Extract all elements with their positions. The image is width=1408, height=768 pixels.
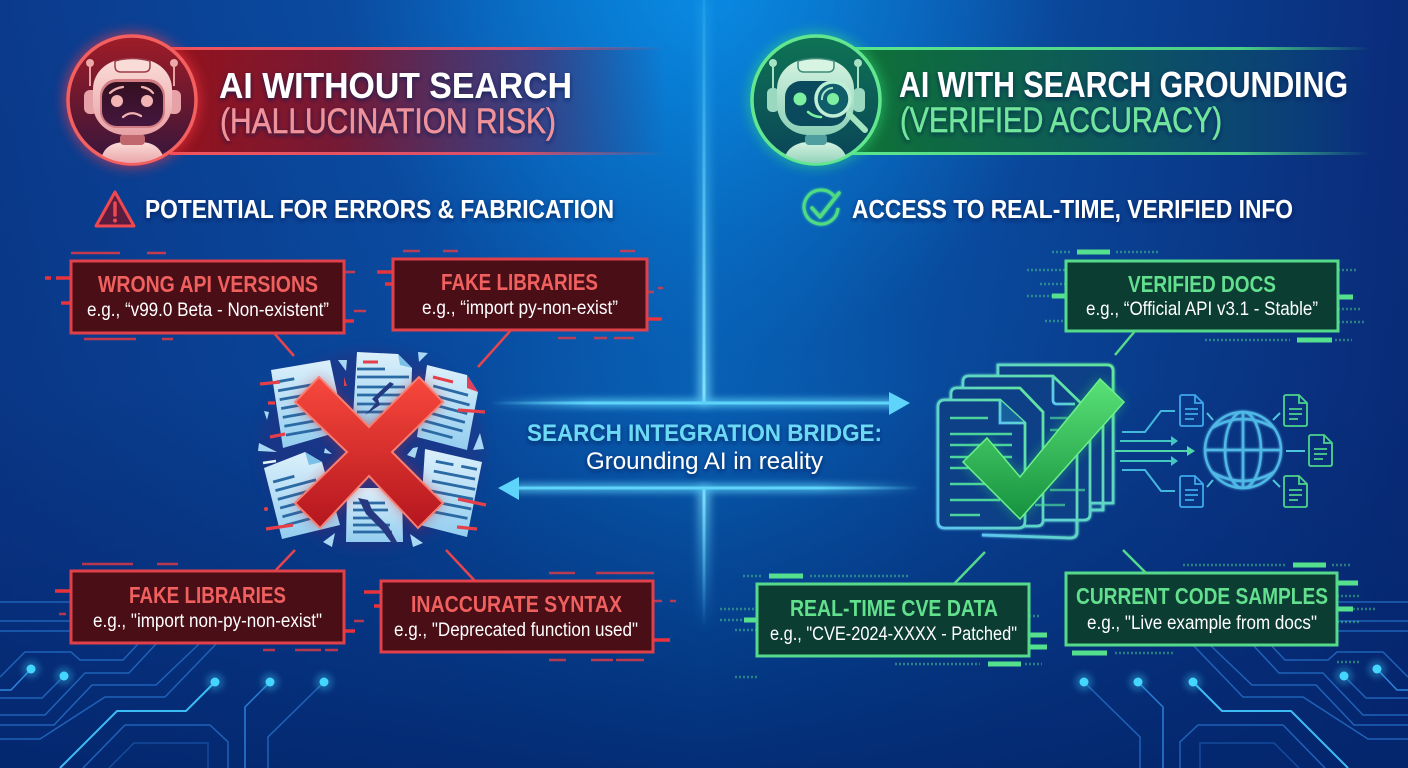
heading: AI without search: AI WITHOUT SEARCH <box>219 65 572 106</box>
right header banner <box>850 47 1370 155</box>
callout: wrong API versions: e.g., “v99.0 Beta - Non-existent” <box>87 300 329 321</box>
central vertical divider <box>700 0 708 628</box>
icon: warning triangle <box>96 192 134 226</box>
red X mark <box>295 377 443 528</box>
green check mark <box>963 379 1124 519</box>
subheading: access to verified info: ACCESS TO REAL-TIME, VERIFIED INFO <box>852 194 1293 224</box>
subheading: potential errors: POTENTIAL FOR ERRORS & FABRICATION <box>145 194 614 224</box>
callout: inaccurate syntax: e.g., "Deprecated function used" <box>394 620 638 641</box>
circuit traces: bottom right <box>1075 602 1408 768</box>
callout: inaccurate syntax <box>364 573 676 660</box>
connector lines: red <box>274 330 511 581</box>
callout: fake libraries (bottom): FAKE LIBRARIES <box>129 582 286 608</box>
icon: data flow arrows to globe <box>1115 411 1195 491</box>
icon: globe <box>1205 412 1281 488</box>
heading: AI with search grounding: (VERIFIED ACCURACY) <box>900 101 1222 140</box>
search integration bridge: arrow to the left <box>498 477 920 500</box>
callout: real-time CVE data: REAL-TIME CVE DATA <box>790 595 998 621</box>
icon: robot with magnifier in green circle <box>748 32 884 168</box>
icon: verified document stack with green check <box>938 365 1124 538</box>
callout: real-time CVE data: e.g., "CVE-2024-XXXX - Patched" <box>770 624 1017 645</box>
callout: fake libraries (bottom): e.g., "import non-py-non-exist" <box>93 611 322 632</box>
heading: AI without search <box>219 65 572 141</box>
callout: verified docs <box>1027 252 1365 340</box>
callout: fake libraries (top) <box>377 251 663 338</box>
search integration bridge: arrow to the right <box>490 392 910 415</box>
icon: verified check circle <box>804 190 839 224</box>
bridge label <box>527 420 882 475</box>
heading: AI without search: (HALLUCINATION RISK) <box>220 102 556 141</box>
callout: wrong API versions <box>45 253 366 339</box>
callout: current code samples <box>1066 565 1376 662</box>
callout: fake libraries (bottom) <box>55 564 364 650</box>
heading: AI with search grounding <box>899 64 1348 140</box>
callout: current code samples: e.g., "Live example from docs" <box>1087 613 1317 634</box>
icon: worried robot in red circle <box>64 32 200 168</box>
connector lines: green <box>954 331 1146 584</box>
callout: fake libraries (top): FAKE LIBRARIES <box>441 269 598 295</box>
callout: verified docs: VERIFIED DOCS <box>1128 271 1276 297</box>
bridge label: SEARCH INTEGRATION BRIDGE: <box>527 420 882 447</box>
callout: current code samples: CURRENT CODE SAMPLES <box>1076 583 1328 609</box>
callout: fake libraries (top): e.g., “import py-non-exist” <box>422 298 618 319</box>
bridge label: Grounding AI in reality <box>586 448 823 475</box>
icon: shattered documents with red X <box>258 350 486 550</box>
circuit traces: bottom left <box>0 602 333 768</box>
left header banner <box>170 47 665 155</box>
callout: wrong API versions: WRONG API VERSIONS <box>98 271 318 297</box>
icon: globe spokes <box>1207 413 1305 487</box>
icon: source documents <box>1180 395 1332 507</box>
callout: inaccurate syntax: INACCURATE SYNTAX <box>411 591 623 617</box>
callout: verified docs: e.g., “Official API v3.1 - Stable” <box>1086 299 1318 320</box>
callout: real-time CVE data <box>720 576 1047 677</box>
